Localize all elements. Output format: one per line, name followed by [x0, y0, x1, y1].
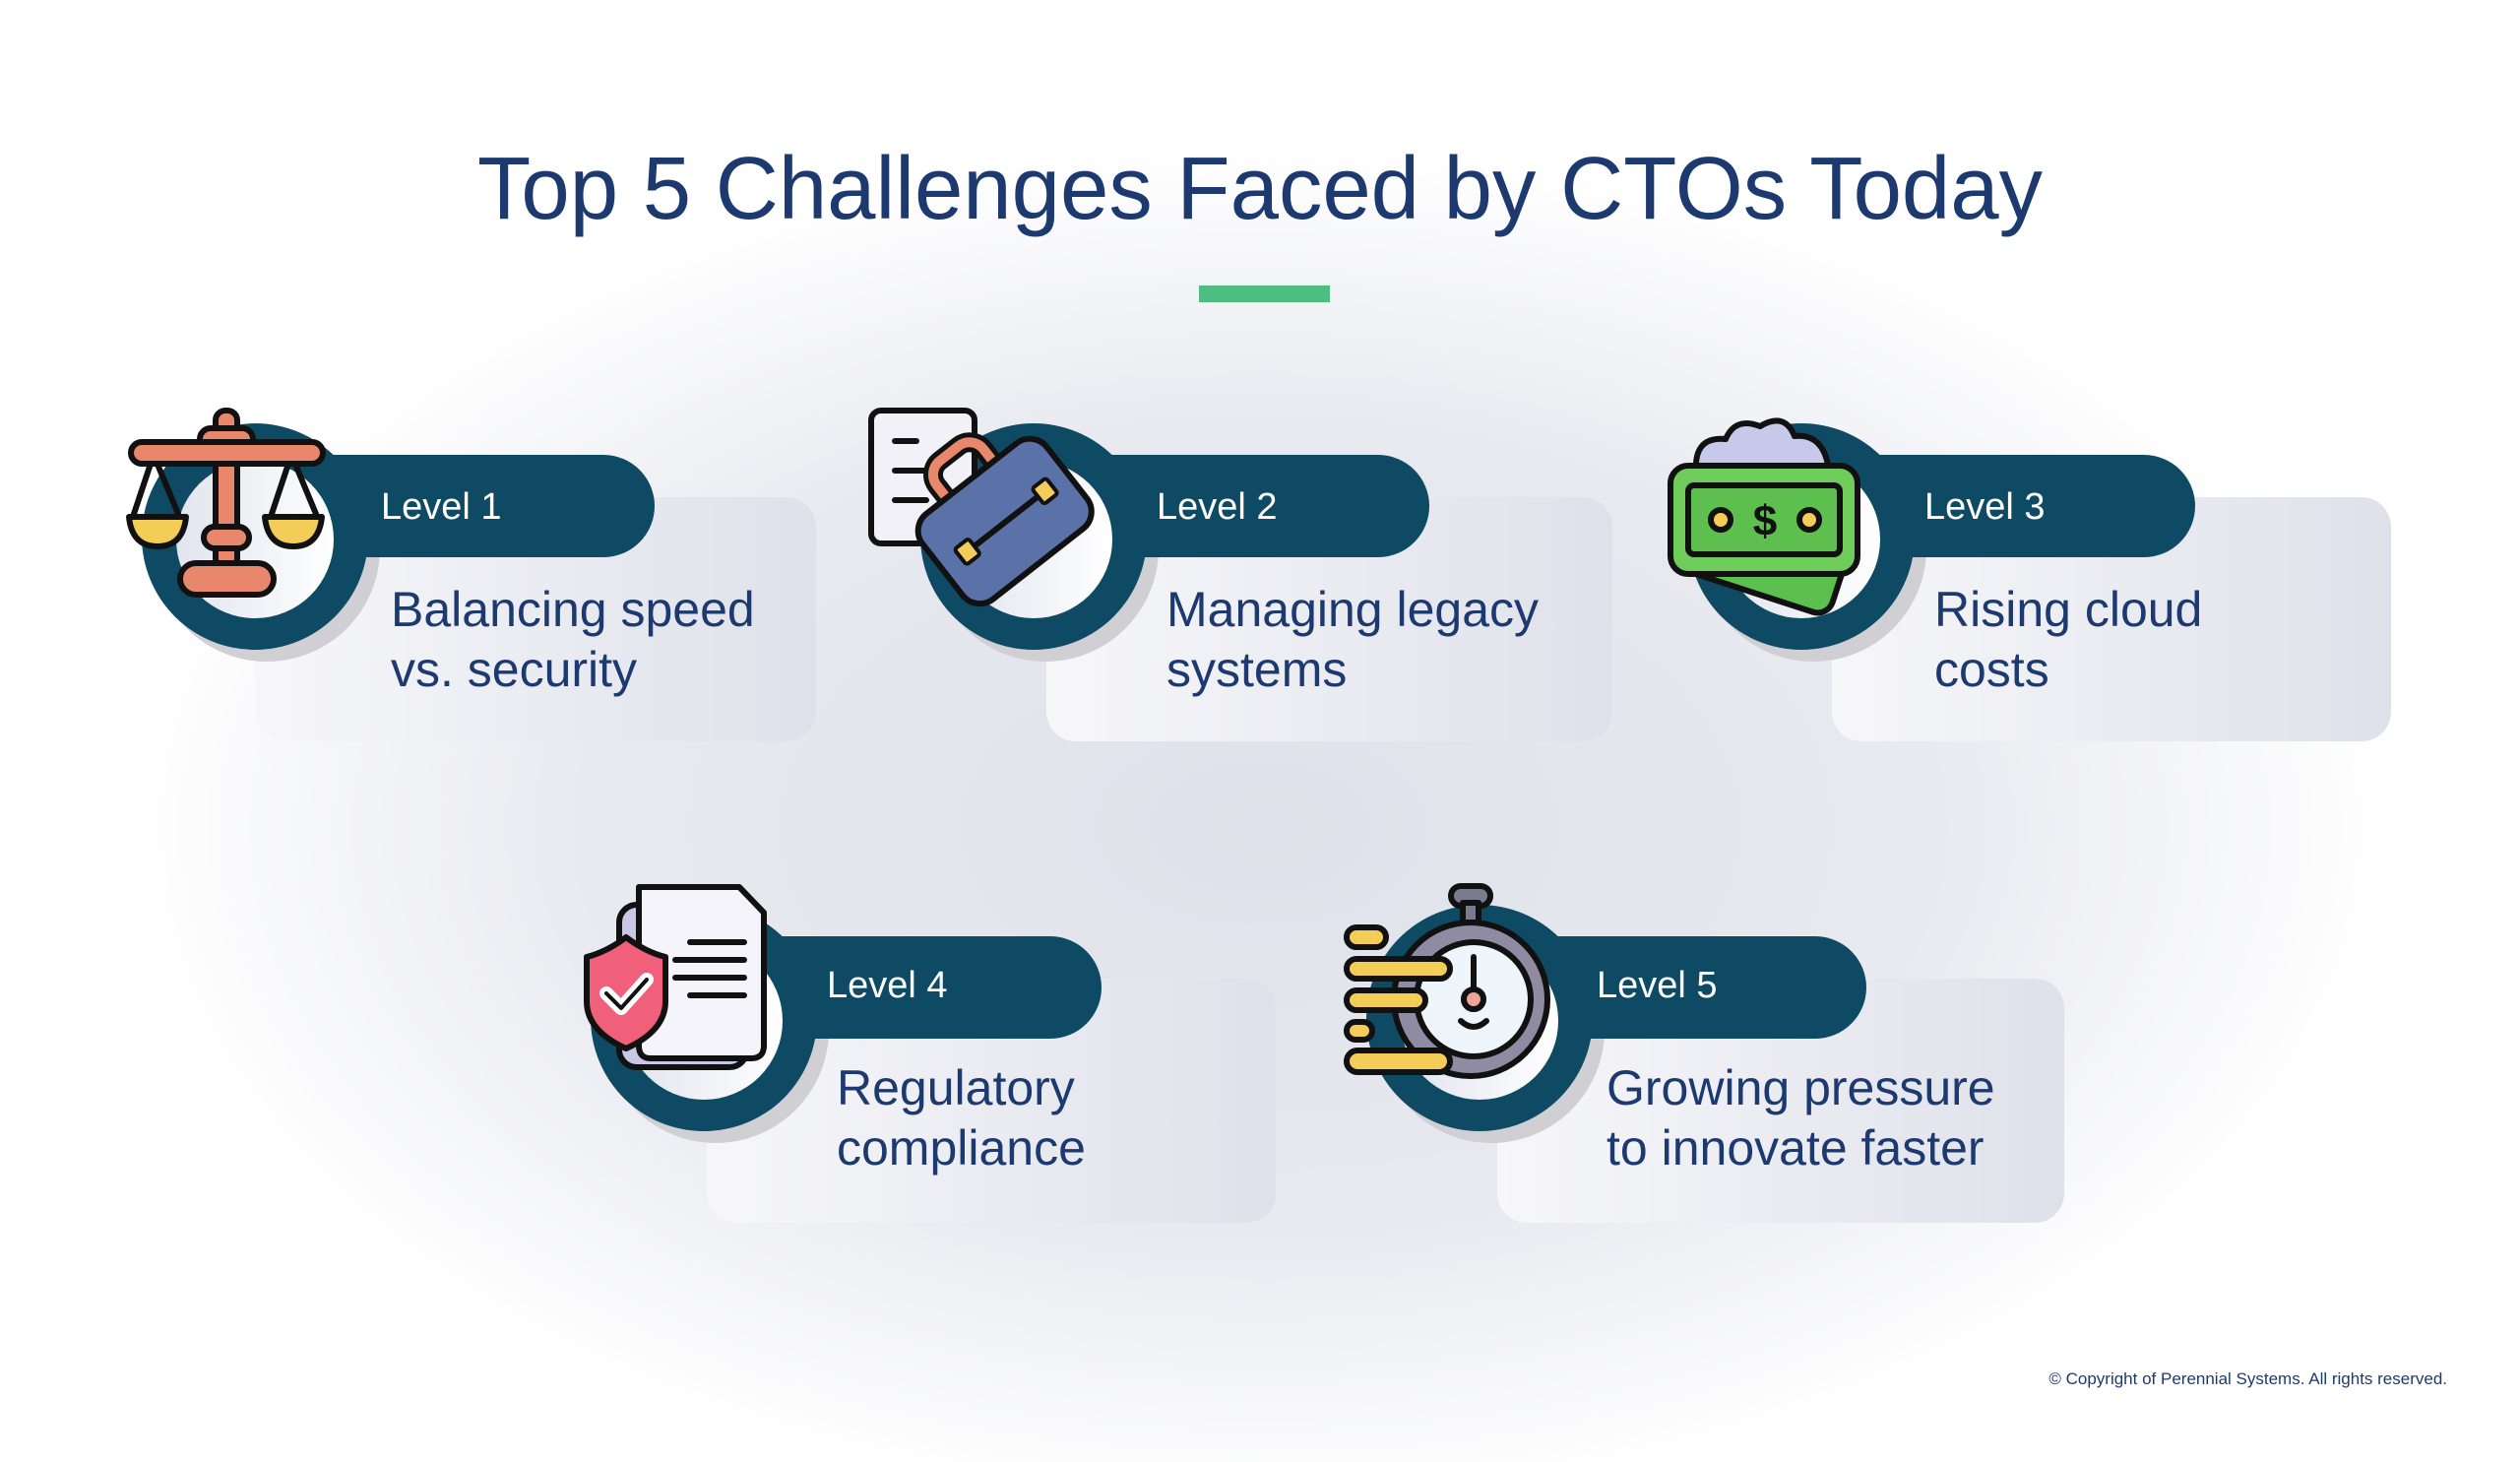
panel: level 1: Balancing speed [391, 582, 755, 637]
panel: level 5: Level 5 [1597, 965, 1718, 1006]
icon: stopwatch [1347, 886, 1547, 1076]
panel: level 5 [1366, 905, 2064, 1223]
panel: level 5: to innovate faster [1606, 1120, 1984, 1176]
panel: level 2: systems [1166, 642, 1347, 697]
panel: level 2 [920, 423, 1612, 741]
icon: money and cloud: $ [1753, 497, 1777, 545]
panel: level 4: compliance [837, 1120, 1086, 1176]
title underline accent [1199, 286, 1330, 302]
panel: level 4: Regulatory [837, 1060, 1075, 1115]
title: Top 5 Challenges Faced by CTOs Today [477, 140, 2043, 238]
copyright footer: © Copyright of Perennial Systems. All rights reserved. [2048, 1369, 2447, 1388]
panel: level 4: Level 4 [827, 965, 948, 1006]
panel: level 3: Level 3 [1924, 486, 2046, 528]
panel: level 3: costs [1934, 642, 2049, 697]
panel: level 1 [142, 423, 816, 741]
icon: scales [129, 411, 323, 595]
panel: level 5: Growing pressure [1606, 1060, 1995, 1115]
icon: money and cloud [1670, 420, 1858, 617]
panel: level 3 [1688, 423, 2391, 741]
panel: level 2: Managing legacy [1166, 582, 1539, 637]
panel: level 1: Level 1 [381, 486, 502, 528]
panel: level 3: Rising cloud [1934, 582, 2202, 637]
panel: level 2: Level 2 [1157, 486, 1278, 528]
panel: level 4 [591, 905, 1276, 1223]
icon: shield and documents [587, 887, 764, 1067]
panel: level 1: vs. security [391, 642, 637, 697]
icon: briefcase and document [871, 404, 1101, 612]
